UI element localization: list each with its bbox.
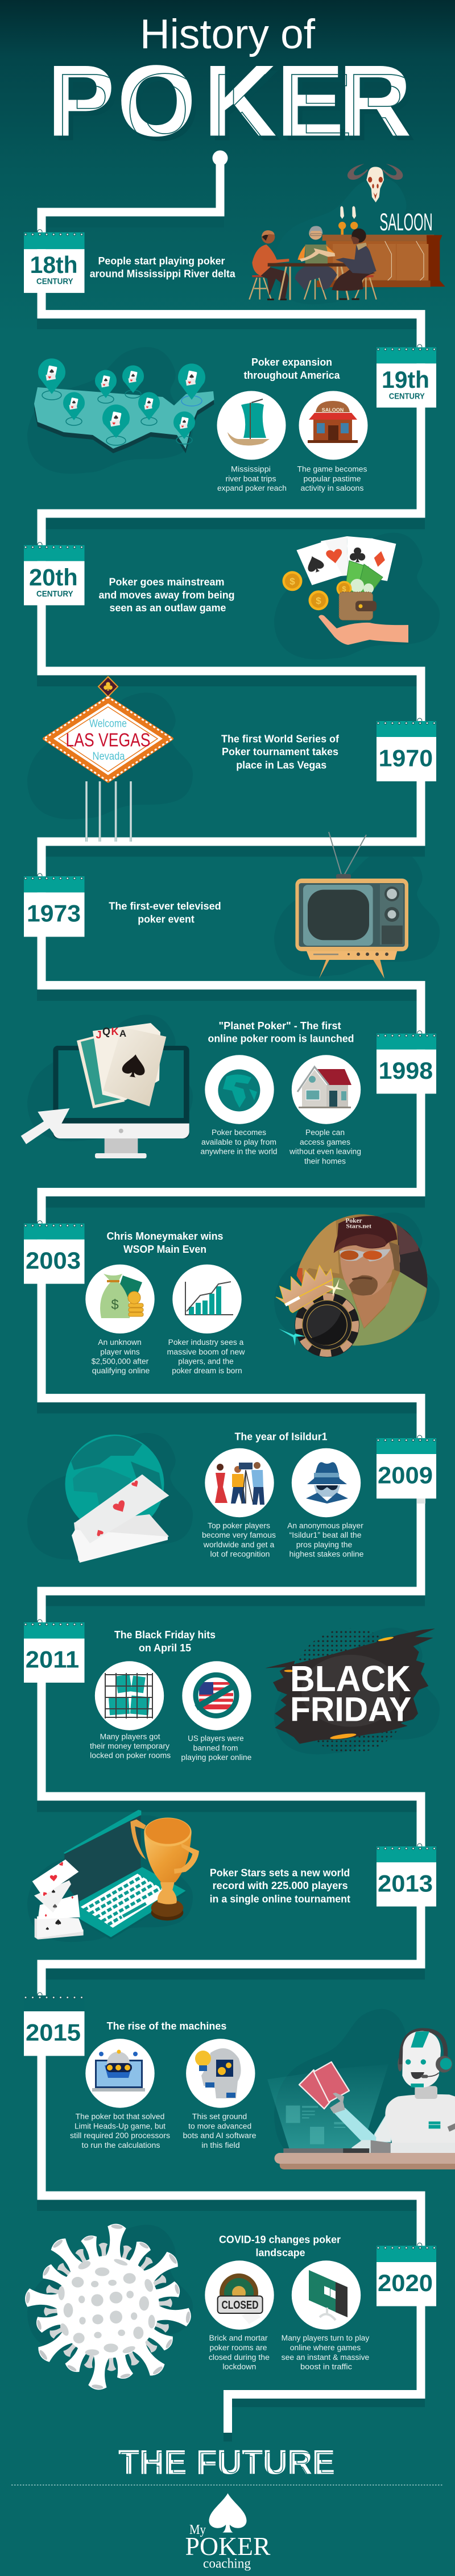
text: 2015 bullet points: to run the calculations	[82, 2141, 160, 2150]
icon: bull skull	[348, 164, 403, 202]
text: 1998 bullet points: without even leaving	[289, 1147, 361, 1156]
text: 1973 description: The first-ever televised	[109, 900, 221, 912]
icon: money bag	[85, 1265, 155, 1333]
text: 1998 bullet points: Poker becomes	[212, 1128, 266, 1137]
icon: coronavirus	[24, 2223, 192, 2391]
text: 2015 bullet points: still required 200 processors	[70, 2131, 170, 2140]
text: 2009 bullet points: lot of recognition	[210, 1550, 270, 1559]
text: 20th century description: Poker goes mainstream	[109, 575, 224, 588]
text: 2009 bullet points: “Isildur1” beat all the	[289, 1531, 362, 1539]
robot head	[398, 2030, 452, 2088]
heading: COVID-19: landscape	[256, 2246, 305, 2258]
photo	[294, 1211, 431, 1348]
illustration: cards, wallet, hand: $	[342, 585, 346, 593]
text: 2011 bullet points: playing poker online	[181, 1753, 251, 1762]
text: 2003 bullet points: $2,500,000 after	[92, 1357, 149, 1365]
text: 18th century description: around Mississippi River delta	[90, 268, 235, 280]
heading: rise of the machines: The rise of the machines	[107, 2020, 226, 2032]
text: 2003 bullet points: An unknown	[98, 1338, 142, 1347]
text: 2015 bullet points: The poker bot that solved	[76, 2112, 164, 2121]
sparkle: teal	[279, 1329, 305, 1346]
heading: Planet Poker: "Planet Poker" - The first	[218, 1020, 341, 1032]
text: 2015 bullet points: Limit Heads-Up game, but	[75, 2122, 166, 2130]
illustration: cards, wallet, hand: $	[316, 595, 321, 606]
photo: Stars.net	[346, 1223, 372, 1229]
text: 2003 bullet points: massive boom of new	[167, 1348, 245, 1356]
illustration: laptop, trophy and cards	[32, 1810, 199, 1940]
calendar: 2015: 2015	[26, 2019, 81, 2046]
logo: My Poker Coaching: My	[189, 2523, 206, 2537]
calendar: 2003	[24, 1221, 84, 1284]
crown	[276, 1265, 333, 1312]
text: 2013 description	[210, 1866, 350, 1904]
icon: Las Vegas sign: Nevada	[92, 751, 125, 763]
text: 2015 bullet points: in this field	[201, 2141, 240, 2150]
title: History of: History of	[140, 11, 316, 57]
text: 1973 description	[109, 900, 221, 925]
heading: Chris Moneymaker: Chris Moneymaker wins	[107, 1230, 223, 1242]
calendar: 2011: 2011	[26, 1646, 79, 1673]
illustration: cards, wallet, hand: $	[289, 576, 295, 587]
text: 1970 description: Poker tournament takes	[222, 746, 338, 757]
text: 1998 bullet points	[200, 1128, 361, 1165]
middle man	[295, 226, 337, 300]
playing cards: A	[119, 1028, 126, 1039]
icon: river boat	[217, 391, 286, 459]
illustration: cards, wallet, hand	[282, 536, 408, 645]
illustration: monitor with cards	[21, 1023, 189, 1158]
text: 2009 bullet points: highest stakes online	[289, 1550, 364, 1559]
text: 2020 bullet points: Many players turn to play	[282, 2334, 370, 2342]
illustration: Black Friday banner: FRIDAY	[290, 1691, 411, 1729]
text: 2015 bullet points: to more advanced	[188, 2122, 251, 2130]
calendar: 2009: 2009	[378, 1461, 433, 1489]
illustration: Chris Moneymaker portrait with crown and chip	[276, 1211, 431, 1357]
calendar: 2020	[377, 2243, 436, 2306]
text: 2015 bullet points: This set ground	[192, 2112, 247, 2121]
text: 19th century bullet points: activity in saloons	[300, 484, 364, 492]
text: 1998 bullet points: their homes	[304, 1157, 346, 1165]
text: 2011 bullet points: banned from	[193, 1743, 238, 1752]
illustration: USA map with pins	[34, 358, 214, 453]
text: 1998 bullet points: People can	[305, 1128, 345, 1137]
calendar: 19th century	[377, 345, 436, 408]
laptop	[64, 1810, 186, 1940]
left man	[249, 230, 289, 300]
icon: vintage TV	[295, 832, 408, 979]
heading: Black Friday hits: on April 15	[139, 1642, 191, 1654]
title: POKER: POKER	[56, 52, 420, 166]
calendar: 18th century: 18th	[30, 251, 78, 278]
text: 2011 bullet points: locked on poker rooms	[90, 1751, 171, 1759]
text: 2020 bullet points	[209, 2334, 370, 2371]
title: POKER: POKER	[47, 44, 412, 157]
robot cards	[299, 2062, 349, 2109]
woman	[332, 229, 377, 300]
icon: saloon building: SALOON	[322, 407, 344, 413]
heading: poker expansion: Poker expansion	[251, 356, 332, 368]
heading: year of Isildur1: The year of Isildur1	[234, 1431, 328, 1442]
text: 2020 bullet points: lockdown	[222, 2362, 256, 2371]
text: 2003 bullet points	[92, 1338, 245, 1375]
text: 2011 bullet points	[90, 1732, 251, 1762]
text: 2015 bullet points: bots and AI software	[183, 2131, 256, 2140]
text: 18th century description	[90, 255, 235, 280]
trophy	[130, 1817, 199, 1920]
heading: Planet Poker	[208, 1020, 354, 1045]
calendar: 1998: 1998	[379, 1057, 433, 1084]
text: 2020 bullet points: closed during the	[209, 2353, 270, 2362]
heading: Chris Moneymaker	[107, 1230, 223, 1255]
calendar: 19th century: 19th	[382, 366, 429, 393]
text: 2009 bullet points	[202, 1522, 364, 1559]
calendar: 1970: 1970	[379, 745, 433, 771]
text: 20th century description: and moves away from being	[99, 589, 234, 600]
title: POKER	[53, 65, 410, 141]
calendar: 1973: 1973	[27, 900, 81, 927]
icon: globe	[205, 1055, 274, 1124]
calendar: 2013	[377, 1844, 436, 1907]
card deck	[74, 1514, 169, 1561]
text: 1998 bullet points: available to play from	[201, 1138, 276, 1146]
calendar: 2011	[24, 1620, 84, 1683]
bar counter	[317, 235, 445, 287]
text: 1970 description: place in Las Vegas	[236, 759, 326, 771]
heading: THE FUTURE: THE FUTURE	[118, 2444, 335, 2482]
calendar: 20th century: CENTURY	[36, 589, 73, 599]
timeline path	[42, 150, 421, 2433]
heading: THE FUTURE: THE FUTURE	[121, 2446, 337, 2484]
icon: growth chart	[172, 1265, 242, 1333]
calendar: 1998	[377, 1031, 436, 1094]
playing cards: Q	[102, 1026, 110, 1037]
arrow cursor	[21, 1108, 69, 1144]
icon: AI head with bulb	[186, 2039, 255, 2108]
title: POKER: POKER	[52, 49, 416, 161]
heading: Planet Poker: online poker room is launched	[208, 1033, 354, 1045]
icon: Las Vegas sign	[44, 677, 172, 842]
text: 1973 description: poker event	[138, 913, 195, 925]
calendar: 20th century	[24, 542, 84, 605]
icon: globe with cards	[65, 1435, 169, 1563]
text: 2003 bullet points: poker dream is born	[172, 1366, 242, 1375]
calendar: 2009	[377, 1435, 436, 1504]
table	[268, 263, 359, 300]
logo: My Poker Coaching: POKER	[185, 2532, 271, 2561]
logo: My Poker Coaching: coaching	[203, 2557, 251, 2571]
icon: poker bot laptop	[85, 2039, 155, 2108]
photo: Poker	[345, 1216, 362, 1224]
icon: house	[292, 1055, 361, 1124]
icon: famous people and camera	[205, 1448, 274, 1517]
text: 2013 description: record with 225.000 players	[213, 1879, 348, 1891]
text: 2009 bullet points: worldwide and get a	[203, 1540, 275, 1549]
icon: closed casino	[205, 2260, 274, 2330]
calendar: 1970	[377, 718, 436, 781]
calendar: 20th century: 20th	[29, 564, 78, 591]
calendar: 2020: 2020	[378, 2269, 433, 2296]
calendar: 18th century: CENTURY	[36, 277, 73, 287]
calendar: 19th century: CENTURY	[389, 391, 425, 401]
text: 2011 bullet points: their money temporary	[90, 1742, 169, 1750]
text: 18th century description: People start playing poker	[98, 255, 225, 267]
text: 2009 bullet points: become very famous	[202, 1531, 276, 1539]
text: 19th century bullet points	[217, 465, 367, 492]
icon: money bag: $	[111, 1297, 119, 1312]
text: 1998 bullet points: anywhere in the world	[200, 1147, 278, 1156]
text: 2020 bullet points: Brick and mortar	[209, 2334, 268, 2342]
text: 2003 bullet points: qualifying online	[92, 1366, 150, 1375]
icon: banned USA	[182, 1661, 251, 1730]
calendar: 2015	[24, 1993, 84, 2056]
text: 20th century description	[99, 575, 234, 614]
heading: Chris Moneymaker: WSOP Main Even	[123, 1243, 206, 1255]
cards	[32, 1859, 84, 1940]
heading: poker expansion: throughout America	[243, 369, 340, 381]
heading: Black Friday hits	[114, 1629, 216, 1654]
illustration: robot playing cards	[267, 2030, 455, 2169]
playing cards: J	[96, 1029, 102, 1041]
illustration: Black Friday banner	[266, 1628, 435, 1753]
text: 19th century bullet points: river boat trips	[225, 474, 276, 483]
illustration: saloon scene	[249, 164, 445, 300]
text: 2020 bullet points: boost in traffic	[300, 2362, 352, 2371]
desk	[274, 2140, 455, 2169]
text: 19th century bullet points: The game becomes	[297, 465, 367, 473]
text: 2013 description: in a single online tournament	[210, 1892, 350, 1904]
text: 20th century description: seen as an outlaw game	[109, 602, 226, 614]
poker chip	[295, 1293, 359, 1357]
icon: saloon building	[299, 391, 367, 459]
text: 1970 description: The first World Series of	[221, 732, 340, 744]
text: 19th century bullet points: Mississippi	[231, 465, 271, 473]
text: 2020 bullet points: poker rooms are	[209, 2343, 267, 2352]
calendar: 18th century	[24, 230, 84, 293]
beer taps	[338, 206, 358, 235]
icon: Las Vegas sign: LAS VEGAS	[66, 730, 150, 751]
calendar: 2013: 2013	[378, 1870, 433, 1897]
text: 2013 description: Poker Stars sets a new world	[210, 1866, 350, 1878]
icon: money behind bars	[95, 1661, 164, 1730]
heading: COVID-19: COVID-19 changes poker	[219, 2234, 341, 2245]
hologram	[267, 2064, 388, 2148]
text: 1998 bullet points: access games	[300, 1138, 350, 1146]
icon: anonymous spy	[292, 1448, 361, 1517]
heading: COVID-19	[219, 2234, 341, 2258]
heading: THE FUTURE	[118, 2450, 334, 2474]
text: 2003 bullet points: Poker industry sees a	[168, 1338, 244, 1347]
text: 2020 bullet points: online where games	[290, 2343, 361, 2352]
text: 2009 bullet points: pros playing the	[296, 1540, 352, 1549]
text: 2003 bullet points: players, and the	[178, 1357, 234, 1365]
icon: closed casino: CLOSED	[222, 2299, 258, 2312]
playing cards	[77, 1023, 166, 1108]
playing cards: K	[111, 1026, 118, 1037]
heading: poker expansion	[243, 356, 340, 381]
text: 1970 description	[221, 732, 340, 771]
text: 2003 bullet points: player wins	[100, 1348, 140, 1356]
text: 2011 bullet points: US players were	[188, 1734, 244, 1742]
calendar: 1973	[24, 873, 84, 937]
text: 19th century bullet points: popular pastime	[304, 474, 361, 483]
text: 2015 bullet points	[70, 2112, 256, 2150]
text: 2009 bullet points: Top poker players	[208, 1522, 270, 1530]
robot arm	[331, 2108, 377, 2144]
robot hand	[330, 2093, 345, 2114]
robot body	[374, 2086, 455, 2150]
text: 2011 bullet points: Many players got	[100, 1732, 160, 1741]
people around table	[249, 226, 377, 300]
calendar: 2003: 2003	[26, 1247, 81, 1274]
sparkle: white	[324, 1278, 344, 1297]
illustration: Black Friday banner: BLACK	[290, 1658, 411, 1699]
icon: Las Vegas sign: Welcome	[89, 718, 127, 730]
text: 2009 bullet points: An anonymous player	[287, 1522, 363, 1530]
text: 2020 bullet points: see an instant & massive	[282, 2353, 369, 2362]
icon: online poker monitor	[292, 2260, 361, 2330]
logo: My Poker Coaching	[185, 2493, 271, 2571]
text: 19th century bullet points: expand poker reach	[217, 484, 287, 492]
heading: Black Friday hits: The Black Friday hits	[114, 1629, 216, 1641]
